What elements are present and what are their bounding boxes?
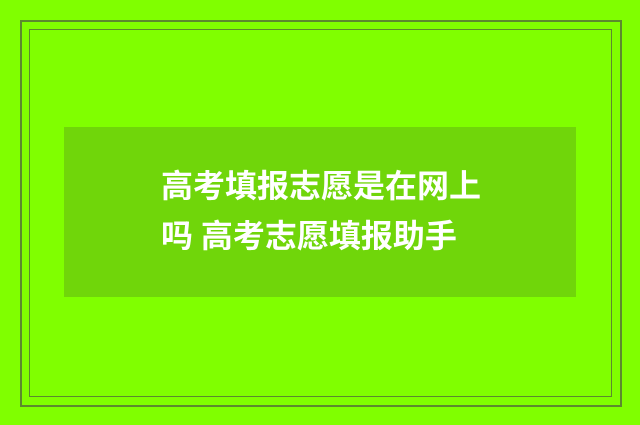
title line 1: 高考填报志愿是在网上 [161,168,481,204]
title text [161,168,481,254]
inner border frame [29,29,612,397]
title panel [64,127,576,297]
title line 2: 吗 高考志愿填报助手 [161,218,457,254]
